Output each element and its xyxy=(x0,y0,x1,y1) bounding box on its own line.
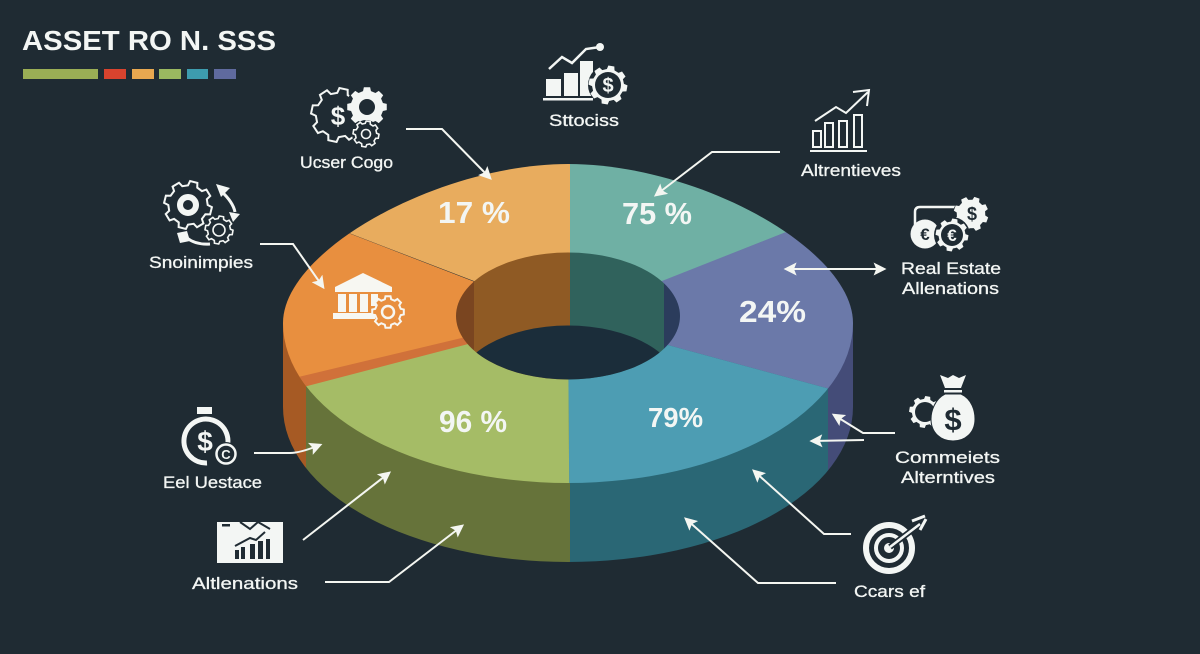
icon: stopwatch dollar: C xyxy=(221,447,231,462)
icon: dollar gears xyxy=(306,83,388,149)
segment: light orange xyxy=(350,164,570,282)
callout: Snoinimpies xyxy=(149,176,323,287)
label: Eel Uestace xyxy=(163,473,262,492)
callout: Real Estate Allenations xyxy=(794,192,1001,298)
label: Ccars ef xyxy=(854,582,925,601)
label: Ucser Cogo xyxy=(300,153,393,172)
arrow xyxy=(656,152,780,195)
label second line: Allenations xyxy=(902,279,999,298)
top face segments xyxy=(283,164,853,483)
segment: purple xyxy=(662,232,853,388)
segment: blue xyxy=(568,345,828,483)
callout: Ccars ef xyxy=(686,471,926,601)
percentage: 79: 79% xyxy=(648,402,703,433)
icon: euro coins and gear: $ xyxy=(967,204,977,224)
icon: cycling gears xyxy=(159,176,240,246)
label: Altlenations xyxy=(192,574,298,593)
callout: Sttociss xyxy=(543,43,630,130)
callout: Altrentieves xyxy=(656,90,901,195)
icon: bank with gear xyxy=(333,273,404,328)
percentage: 75: 75 % xyxy=(622,196,692,231)
callout: Eel Uestace xyxy=(163,407,320,492)
icon: stopwatch dollar: $ xyxy=(197,426,213,457)
icon: target with arrow xyxy=(866,516,926,571)
label: Sttociss xyxy=(549,111,619,130)
label: Altrentieves xyxy=(801,161,901,180)
icon: bars, trend line and dollar gear: $ xyxy=(602,75,614,97)
percentage: 96: 96 % xyxy=(439,404,507,439)
label: Snoinimpies xyxy=(149,253,253,272)
double arrow xyxy=(794,268,884,270)
icon: outlined growth chart xyxy=(810,90,869,151)
arrow xyxy=(406,129,490,178)
donut chart xyxy=(283,164,853,562)
segment: dark orange strip xyxy=(300,338,468,389)
icon: stopwatch dollar xyxy=(184,407,238,466)
icon: euro coins and gear: € xyxy=(920,225,930,244)
arrows xyxy=(303,473,462,582)
centre hole xyxy=(456,252,680,380)
arrows xyxy=(812,415,895,441)
segment: orange xyxy=(283,234,474,386)
icon: euro coins and gear xyxy=(910,192,993,254)
label second line: Alterntives xyxy=(901,468,995,487)
callout: Altlenations xyxy=(192,473,462,593)
arrows xyxy=(686,471,851,583)
label: Real Estate xyxy=(901,259,1001,278)
icon: window chart xyxy=(217,522,283,563)
side walls xyxy=(283,324,853,562)
callout: Commeiets Alterntives xyxy=(812,375,1000,487)
percentage: 24: 24% xyxy=(739,294,806,329)
colour legend bars xyxy=(23,69,236,79)
segment: green xyxy=(306,344,570,483)
title: ASSET RO N. SSS xyxy=(22,25,276,56)
icon: money bag and gear xyxy=(907,375,975,441)
icon: money bag and gear: $ xyxy=(944,402,962,437)
icon: dollar gears: $ xyxy=(331,101,346,131)
arrow xyxy=(260,244,323,287)
callout: Ucser Cogo xyxy=(300,83,490,178)
label: Commeiets xyxy=(895,448,1000,467)
percentage: 17: 17 % xyxy=(438,195,510,230)
icon: euro coins and gear: € xyxy=(947,226,957,245)
segment: teal xyxy=(570,164,786,282)
arrow xyxy=(254,445,320,453)
